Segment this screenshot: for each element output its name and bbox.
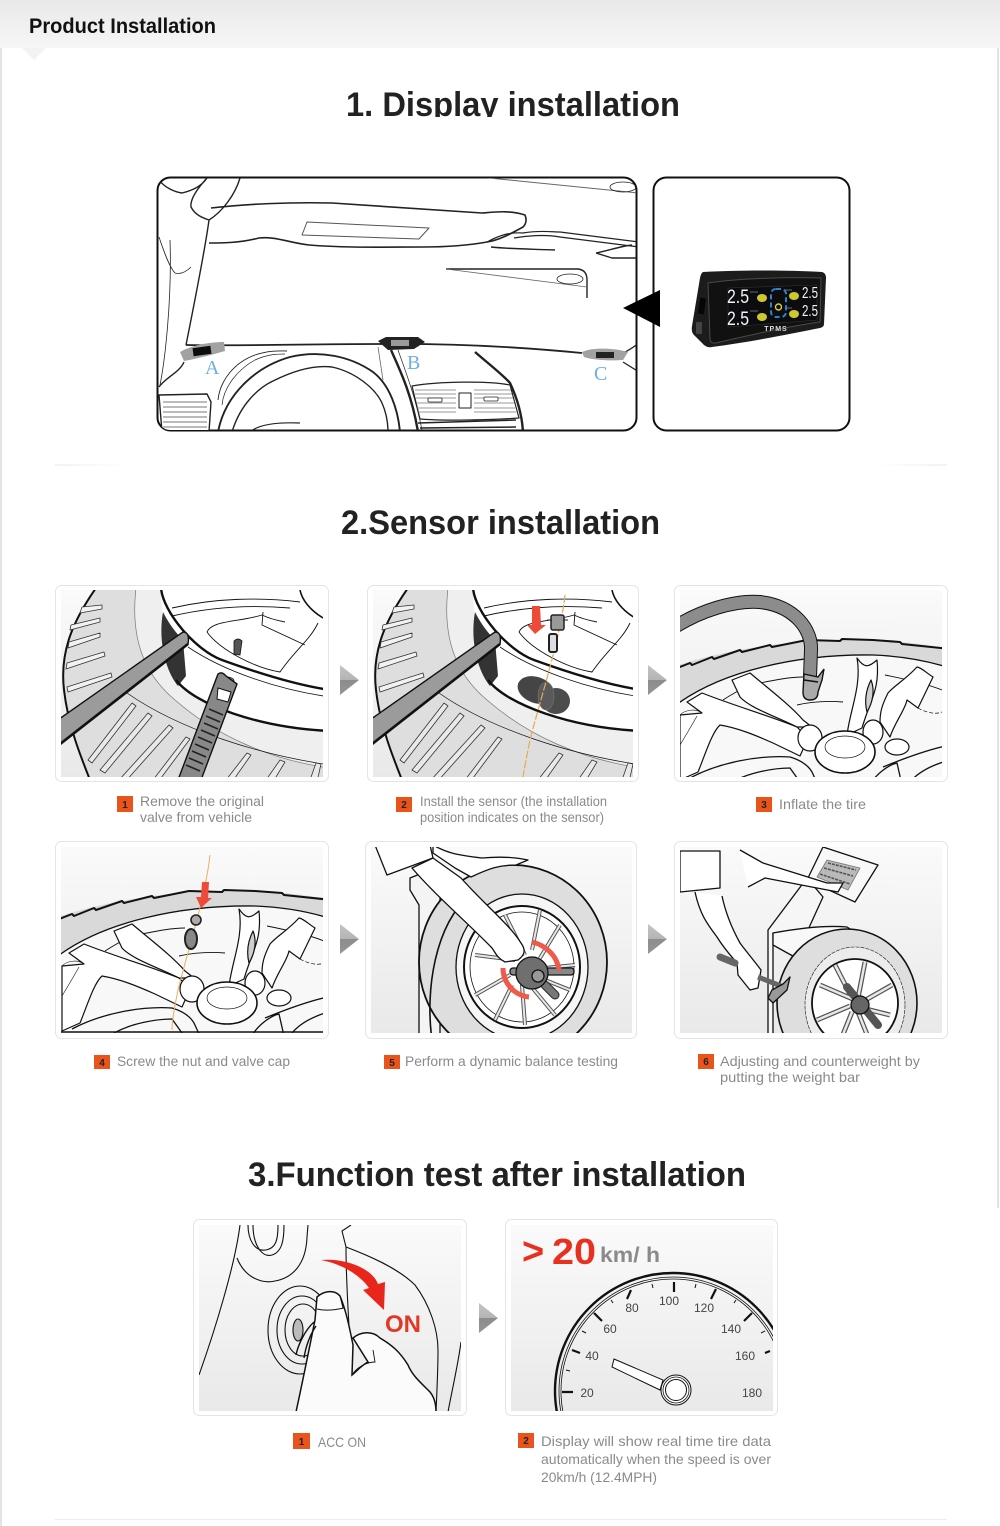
caption 6: putting the weight bar: [720, 1069, 860, 1085]
illustration: removing valve: [55, 588, 330, 785]
gauge labels: 140: [721, 1322, 741, 1336]
step badge 6: 6: [703, 1057, 709, 1068]
gauge labels: 120: [694, 1301, 714, 1315]
icon: TPMS display device: 2.5: [727, 309, 749, 330]
panel: step 5 balance test: [366, 842, 636, 1069]
panel: windshield mounting positions: [158, 178, 639, 432]
step badge 1: 1: [122, 800, 128, 811]
step badge 7: [293, 1433, 310, 1449]
illustration: screwing nut and cap: [54, 855, 332, 1041]
gauge labels: 40: [585, 1349, 599, 1363]
caption 8: automatically when the speed is over: [541, 1451, 771, 1467]
step badge 4: [94, 1055, 110, 1069]
speed heading: 20: [552, 1231, 596, 1272]
icon: TPMS display device: 2.5: [727, 287, 749, 308]
step badge 2: 2: [401, 800, 407, 811]
icon: TPMS display device: 2.5: [802, 285, 818, 302]
speed heading: [522, 1231, 660, 1273]
caption 1: Remove the original: [140, 793, 264, 809]
step badge 5: [384, 1055, 400, 1069]
caption 8: 20km/h (12.4MPH): [541, 1469, 657, 1485]
heading: display installation: 1. Display installation: [346, 86, 680, 124]
arrow: function step 1 to 2: [479, 1303, 498, 1333]
icon: TPMS display device: 2.5: [802, 303, 818, 320]
step badge 3: [756, 797, 772, 812]
gauge labels: 180: [742, 1386, 762, 1400]
speed heading: >: [522, 1231, 544, 1273]
heading: sensor installation: 2.Sensor installation: [341, 504, 660, 542]
panel: step 4 screw nut: [54, 842, 332, 1069]
gauge labels: 100: [659, 1294, 679, 1308]
label: ON: ON: [385, 1311, 421, 1338]
caption 4: Screw the nut and valve cap: [117, 1053, 290, 1069]
arrow: step 2 to 3: [648, 665, 667, 695]
step badge 2: [396, 797, 412, 812]
panel: step 1 remove valve: [55, 586, 330, 825]
caption 8: [541, 1433, 771, 1485]
gauge labels: 60: [603, 1322, 617, 1336]
step badge 7: 1: [299, 1437, 305, 1448]
caption 2: Install the sensor (the installation: [420, 793, 607, 809]
header bar: [0, 0, 1000, 60]
illustration: inflating tire: [670, 602, 950, 790]
step badge 1: [117, 796, 133, 812]
caption 6: Adjusting and counterweight by: [720, 1053, 920, 1069]
speed heading: km/ h: [600, 1244, 660, 1267]
illustration: adjusting weight bar: [680, 847, 918, 1033]
mount C: [582, 349, 628, 360]
illustration: balancing machine and wheel: [375, 847, 608, 1033]
step badge 4: 4: [99, 1058, 105, 1069]
panel: speed over 20 km/h: [505, 1219, 778, 1485]
caption 8: Display will show real time tire data: [541, 1433, 771, 1449]
gauge labels: 80: [625, 1301, 639, 1315]
gauge labels: 160: [735, 1349, 755, 1363]
arrow: points to mounting positions: [623, 290, 660, 327]
step badge 8: 2: [523, 1436, 529, 1447]
arrow: step 1 to 2: [340, 665, 359, 695]
caption 2: [420, 793, 607, 825]
panel: step 2 install sensor: [367, 586, 642, 825]
step badge 8: [518, 1433, 534, 1448]
heading: function test: 3.Function test after installation: [248, 1156, 746, 1194]
step badge 5: 5: [389, 1058, 395, 1069]
caption 1: [140, 793, 264, 825]
arrow: step 4 to 5: [340, 924, 359, 954]
label B: B: [407, 352, 420, 374]
illustration: installing sensor: [373, 590, 633, 777]
label A: A: [205, 357, 220, 379]
gauge labels: 20: [580, 1386, 594, 1400]
icon: TPMS display device: [692, 270, 826, 347]
gauge labels: [580, 1294, 762, 1400]
arrow: red turn direction: [321, 1260, 385, 1310]
arrow: step 5 to 6: [648, 924, 667, 954]
panel: step 3 inflate: [670, 586, 950, 812]
illustration: turning ignition key: [199, 1225, 461, 1412]
gauge: speedometer: [554, 1272, 773, 1411]
caption 1: valve from vehicle: [140, 809, 252, 825]
mount B: [378, 337, 425, 350]
caption 2: position indicates on the sensor): [420, 809, 604, 825]
panel: ACC on: [194, 1220, 466, 1450]
caption 5: Perform a dynamic balance testing: [405, 1053, 618, 1069]
panel: step 6 counterweight: [674, 842, 948, 1085]
header title: Product Installation: [29, 15, 216, 38]
panel: TPMS display: [654, 178, 850, 430]
caption 3: Inflate the tire: [779, 796, 866, 812]
step badge 6: [698, 1054, 714, 1069]
illustration: car dashboard: [159, 178, 639, 432]
step badge 3: 3: [761, 800, 767, 811]
label C: C: [594, 363, 607, 385]
icon: TPMS display device: TPMS: [764, 326, 788, 333]
mount A: [180, 342, 225, 361]
caption 6: [720, 1053, 920, 1085]
caption 7: ACC ON: [318, 1434, 366, 1450]
